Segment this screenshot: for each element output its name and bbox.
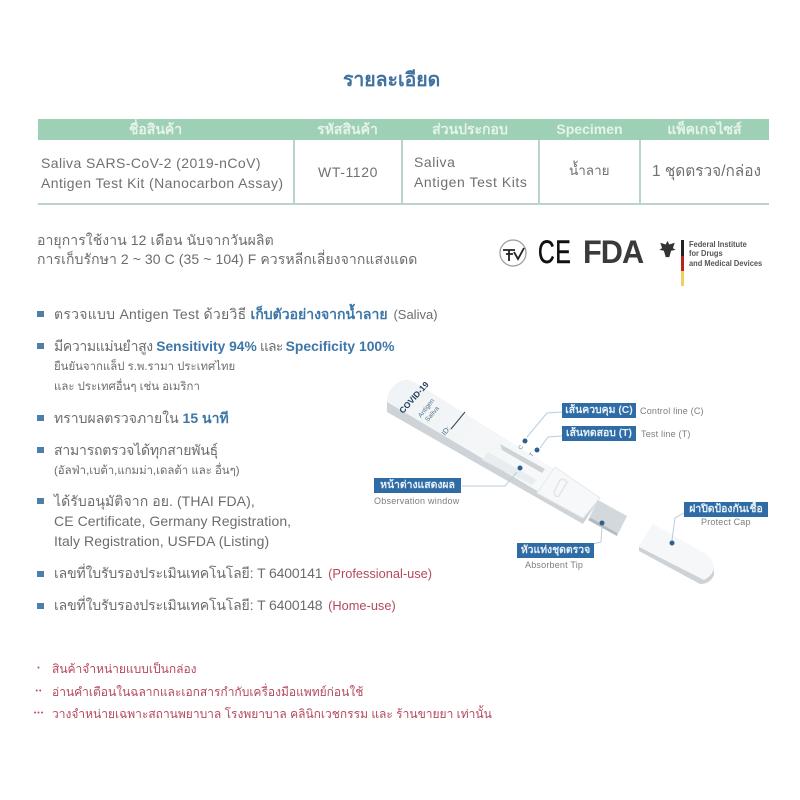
icon: flag stripe bbox=[681, 240, 684, 286]
column divider 1 bbox=[293, 140, 294, 204]
device printed text: Saliva bbox=[424, 405, 441, 423]
label: absorbent tip english: Absorbent Tip bbox=[525, 560, 583, 570]
bullet 5 bbox=[37, 498, 44, 504]
label: test line english: Test line (T) bbox=[641, 429, 691, 439]
icon: CE mark: CE bbox=[538, 234, 571, 270]
protect cap bbox=[639, 524, 714, 584]
title: รายละเอียด bbox=[343, 69, 440, 91]
text: federal institute: Federal Institute bbox=[689, 239, 747, 249]
feature list bbox=[37, 304, 438, 613]
item 7: เลขที่ใบรับรองประเมินเทคโนโลยี: T 6400148 (Home-use) bbox=[54, 597, 396, 613]
item 3: ทราบผลตรวจภายใน 15 นาที bbox=[54, 410, 229, 426]
item 2 detail: และ ประเทศอื่นๆ เช่น อเมริกา bbox=[54, 381, 200, 393]
footnotes bbox=[34, 662, 492, 721]
label: protect cap english: Protect Cap bbox=[701, 517, 751, 527]
label: absorbent tip: หัวแท่งชุดตรวจ bbox=[521, 545, 590, 556]
table bottom rule bbox=[38, 203, 769, 205]
item 4 detail: (อัลฟ่า,เบต้า,แกมม่า,เดลต้า และ อื่นๆ) bbox=[54, 465, 240, 477]
label: control line: เส้นควบคุม (C) bbox=[565, 405, 633, 416]
label: absorbent tip bbox=[517, 543, 594, 558]
item 2: มีความแม่นยำสูง Sensitivity 94% และ Specificity 100% bbox=[54, 338, 395, 354]
label: control line bbox=[562, 403, 636, 418]
marker dots bbox=[518, 438, 674, 546]
text: shelf life and storage bbox=[37, 232, 417, 267]
leader lines bbox=[462, 412, 684, 544]
device printed text: ID: bbox=[439, 424, 452, 437]
diagram: antigen test device bbox=[387, 379, 714, 584]
panel: product table bbox=[38, 119, 769, 205]
item 5: Italy Registration, USFDA (Listing) bbox=[54, 533, 269, 549]
label: observation window english: Observation window bbox=[374, 496, 460, 506]
text: shelf life and storage: อายุการใช้งาน 12 เดือน นับจากวันผลิต bbox=[37, 232, 274, 248]
label: test line bbox=[562, 426, 636, 441]
label: protect cap: ฝาปิดป้องกันเชื้อ bbox=[689, 504, 763, 515]
table header band bbox=[38, 119, 769, 140]
bullet 3 bbox=[37, 415, 44, 421]
cell: product name: Saliva SARS-CoV-2 (2019-nCoV) bbox=[41, 155, 261, 171]
label: protect cap bbox=[684, 502, 768, 517]
bullet 6 bbox=[37, 571, 44, 577]
icon: TV mark bbox=[499, 239, 527, 267]
cell: package size: 1 ชุดตรวจ/กล่อง bbox=[652, 163, 761, 180]
cell: product code: WT-1120 bbox=[318, 164, 378, 180]
item 2 detail bbox=[54, 358, 235, 393]
label: test line: เส้นทดสอบ (T) bbox=[566, 428, 632, 439]
text: shelf life and storage: การเก็บรักษา 2 ~ 30 C (35 ~ 104) F ควรหลีกเลี่ยงจากแสงแดด bbox=[37, 251, 417, 267]
absorbent tip bbox=[588, 500, 627, 536]
footnote 3: วางจำหน่ายเฉพาะสถานพยาบาล โรงพยาบาล คลินิกเวชกรรม และ ร้านขายยา เท่านั้น bbox=[52, 707, 492, 721]
footnote 2: อ่านคำเตือนในฉลากและเอกสารกำกับเครื่องมือแพทย์ก่อนใช้ bbox=[52, 685, 363, 699]
device printed text bbox=[397, 379, 536, 458]
item 6: เลขที่ใบรับรองประเมินเทคโนโลยี: T 6400141 (Professional-use) bbox=[54, 565, 432, 581]
header: specimen: Specimen bbox=[556, 121, 623, 137]
footnotes: •• bbox=[36, 688, 42, 695]
device body bbox=[387, 380, 600, 524]
icon: FDA mark: FDA bbox=[583, 234, 643, 270]
bullet 2 bbox=[37, 343, 44, 349]
column divider 4 bbox=[639, 140, 640, 204]
device printed text: T bbox=[529, 451, 536, 458]
footnotes: • bbox=[37, 665, 41, 672]
text: federal institute bbox=[689, 239, 762, 268]
cell: components bbox=[414, 154, 527, 190]
item 5: CE Certificate, Germany Registration, bbox=[54, 513, 291, 529]
bullet 1 bbox=[37, 311, 44, 317]
header: product name: ชื่อสินค้า bbox=[129, 121, 182, 137]
device printed text: C bbox=[518, 444, 525, 451]
label: control line english: Control line (C) bbox=[640, 406, 704, 416]
column divider 2 bbox=[401, 140, 402, 204]
footnotes: ••• bbox=[34, 710, 44, 717]
label: observation window bbox=[374, 478, 461, 493]
cell: components: Saliva bbox=[414, 154, 455, 170]
item 2 detail: ยืนยันจากแล็ป ร.พ.รามา ประเทศไทย bbox=[54, 361, 235, 373]
bullet 7 bbox=[37, 603, 44, 609]
icon: federal eagle bbox=[660, 241, 676, 258]
cell: product name bbox=[41, 155, 283, 191]
header: product code: รหัสสินค้า bbox=[317, 121, 378, 137]
header: components: ส่วนประกอบ bbox=[432, 121, 508, 137]
cell: product name: Antigen Test Kit (Nanocarbon Assay) bbox=[41, 175, 283, 191]
label: observation window: หน้าต่างแสดงผล bbox=[380, 480, 455, 491]
cell: specimen: น้ำลาย bbox=[569, 163, 610, 178]
item 5 bbox=[53, 493, 291, 549]
item 4: สามารถตรวจได้ทุกสายพันธุ์ bbox=[54, 442, 218, 458]
footnote 1: สินค้าจำหน่ายแบบเป็นกล่อง bbox=[52, 662, 197, 676]
device printed text: COVID-19 bbox=[397, 379, 431, 415]
text: federal institute: and Medical Devices bbox=[689, 258, 762, 268]
cell: components: Antigen Test Kits bbox=[414, 174, 527, 190]
item 1: ตรวจแบบ Antigen Test ด้วยวิธี เก็บตัวอย่างจากน้ำลาย (Saliva) bbox=[54, 306, 438, 322]
device printed text: Antigen bbox=[417, 397, 436, 419]
certification logos bbox=[499, 234, 762, 286]
header: package size: แพ็คเกจไซส์ bbox=[667, 121, 742, 137]
item 5: ได้รับอนุมัติจาก อย. (THAI FDA), bbox=[54, 493, 255, 509]
column divider 3 bbox=[538, 140, 540, 204]
bullet 4 bbox=[37, 447, 44, 453]
text: federal institute: for Drugs bbox=[689, 248, 723, 258]
